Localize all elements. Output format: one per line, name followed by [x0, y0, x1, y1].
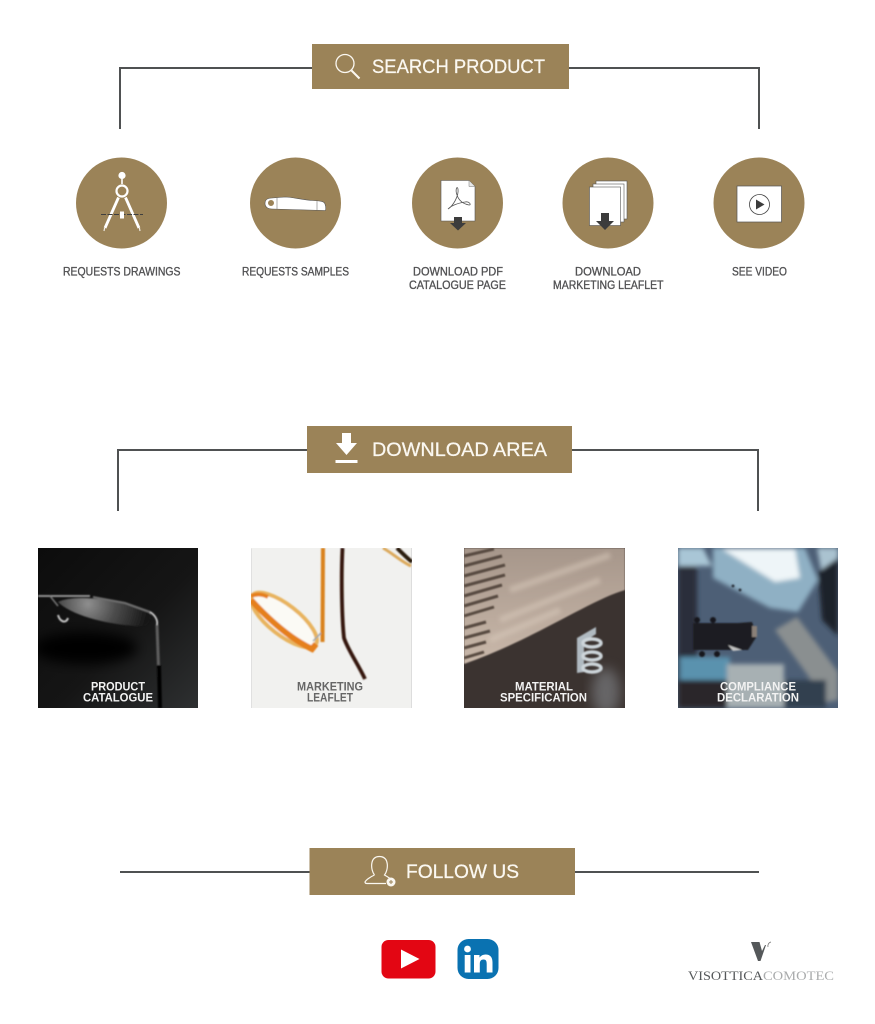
logo: visottica comotec: COMOTEC	[763, 968, 834, 983]
item: download pdf catalogue page	[409, 158, 506, 292]
icon: add user	[365, 856, 396, 886]
thumbnail: marketing leaflet: LEAFLET	[307, 692, 353, 704]
item: requests samples: REQUESTS SAMPLES	[242, 266, 349, 278]
panel: download area	[33, 426, 838, 716]
heading: download area: DOWNLOAD AREA	[372, 439, 547, 461]
panel: search product	[63, 44, 804, 292]
thumbnail: product catalogue: PRODUCT	[91, 682, 145, 694]
heading: download area	[307, 426, 572, 473]
heading: search product	[312, 44, 569, 89]
icon: eyewear temple sample	[265, 197, 326, 210]
thumbnail: material specification: MATERIAL	[515, 682, 573, 694]
icon: magnifying glass	[336, 54, 360, 78]
item: see video	[714, 158, 804, 278]
thumbnail: compliance declaration	[678, 548, 838, 708]
icon: compass	[101, 173, 143, 231]
thumbnail: material specification	[464, 548, 625, 716]
icon: linkedin	[458, 939, 498, 979]
item: download marketing leaflet	[553, 158, 664, 292]
icon: video player	[737, 186, 782, 222]
item: requests drawings	[63, 158, 181, 278]
panel: follow us	[120, 848, 834, 983]
item: download marketing leaflet: MARKETING LEAFLET	[553, 280, 664, 292]
icon: youtube	[382, 940, 436, 978]
heading: search product: SEARCH PRODUCT	[372, 56, 545, 78]
item: download pdf catalogue page: CATALOGUE PAGE	[409, 280, 506, 292]
icon: download arrow	[336, 433, 358, 463]
item: download pdf catalogue page: DOWNLOAD PDF	[413, 266, 503, 278]
bracket connector: download area	[118, 450, 758, 511]
heading: follow us: FOLLOW US	[406, 861, 519, 883]
thumbnail: compliance declaration: DECLARATION	[717, 692, 799, 704]
bracket connector: search product	[120, 68, 759, 129]
connector line: follow us	[120, 871, 759, 873]
thumbnail: material specification: SPECIFICATION	[500, 692, 587, 704]
heading: follow us	[310, 848, 575, 895]
thumbnail: marketing leaflet	[243, 548, 412, 708]
thumbnail: compliance declaration: COMPLIANCE	[720, 682, 796, 694]
logo: visottica comotec: VISOTTICA	[688, 968, 764, 983]
item: download marketing leaflet: DOWNLOAD	[575, 266, 641, 278]
logo: visottica comotec	[688, 942, 834, 983]
thumbnail: product catalogue: CATALOGUE	[83, 692, 153, 704]
icon: document stack with download arrow	[590, 181, 627, 230]
icon: pdf document with download arrow	[441, 180, 475, 230]
item: requests drawings: REQUESTS DRAWINGS	[63, 266, 181, 278]
thumbnail: product catalogue	[33, 548, 198, 708]
item: see video: SEE VIDEO	[732, 266, 787, 278]
item: requests samples	[242, 158, 349, 278]
thumbnail: marketing leaflet: MARKETING	[297, 682, 363, 694]
